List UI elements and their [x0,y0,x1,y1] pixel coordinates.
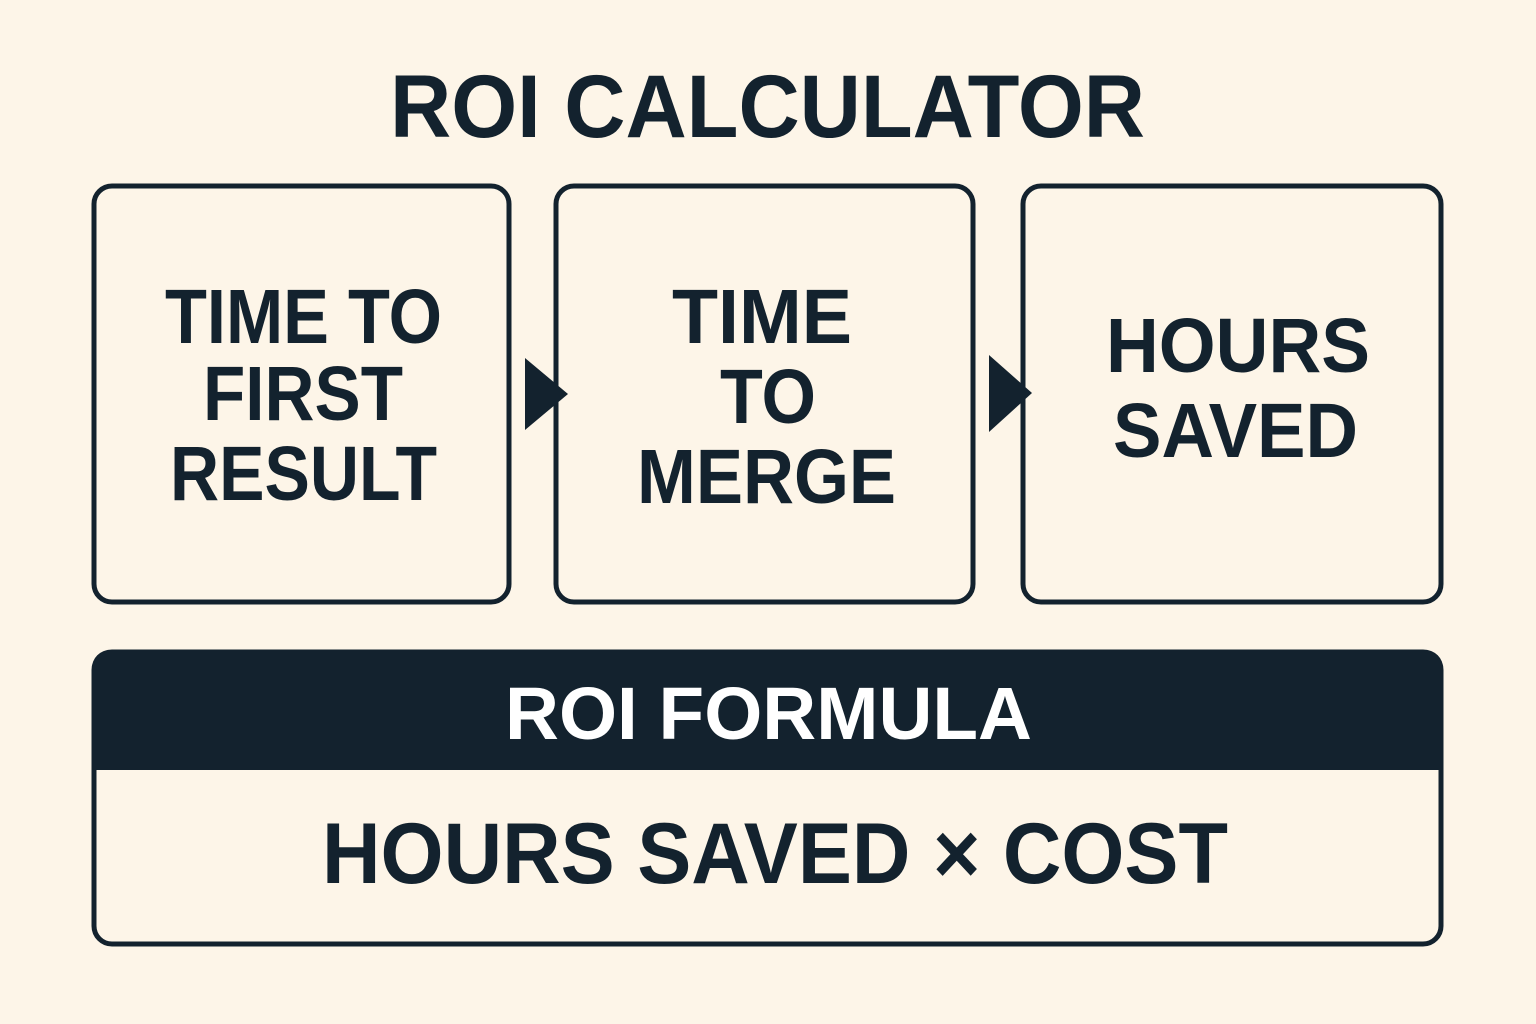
panel: time to first result: RESULT [170,431,437,517]
panel: time to merge [556,186,973,602]
panel: time to first result: FIRST [203,351,403,437]
panel: roi formula [92,650,1443,944]
panel: time to merge: TO [720,354,816,440]
title: ROI CALCULATOR [390,56,1145,156]
arrow 1 [525,358,568,430]
formula text: HOURS SAVED × COST [322,806,1228,902]
panel: hours saved: SAVED [1113,388,1358,474]
formula header [92,650,1443,770]
panel: time to first result [94,186,509,602]
panel: time to merge: MERGE [637,434,896,520]
panel: hours saved [1023,186,1441,602]
panel: time to first result: TIME TO [165,274,442,360]
panel: hours saved: HOURS [1106,303,1370,389]
panel: roi formula: ROI FORMULA [505,672,1032,755]
arrow 2 [989,355,1032,432]
panel: time to merge: TIME [672,274,852,360]
